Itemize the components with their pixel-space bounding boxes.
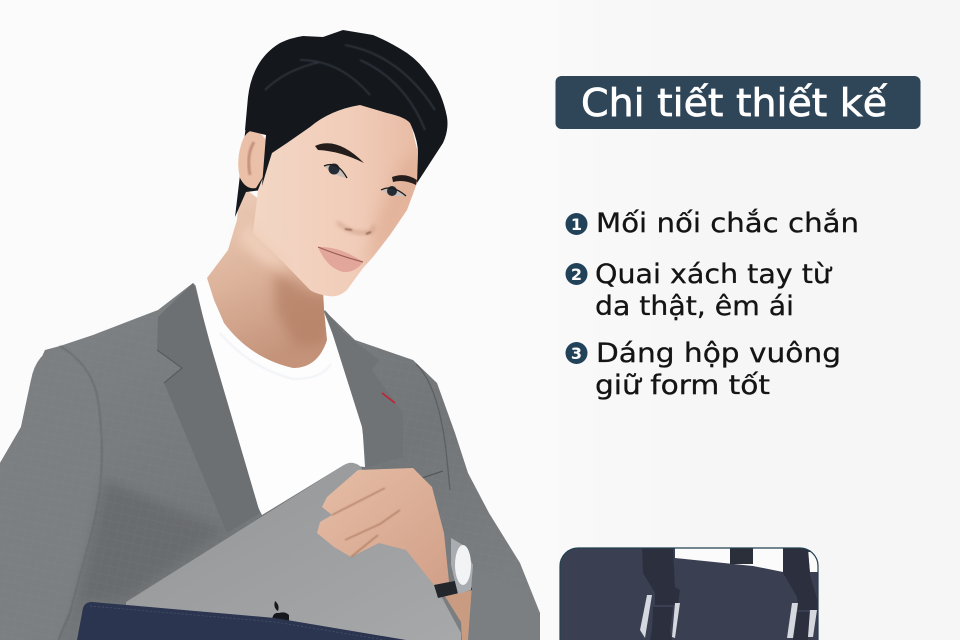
collar seam — [220, 333, 331, 379]
bag detail thumbnail — [560, 548, 818, 640]
sleeve shading — [0, 346, 102, 640]
bag body — [560, 548, 818, 640]
t-shirt — [195, 278, 365, 515]
far handle — [730, 548, 753, 564]
number badge 1 — [566, 213, 588, 235]
list item 2 — [566, 259, 833, 322]
right strap — [783, 548, 818, 610]
jaw highlight blending face and neck — [238, 222, 292, 272]
photo: model with laptop and sleeve — [0, 30, 540, 640]
right armhole seam — [416, 364, 450, 490]
item 2 text: Quai xách tay từ — [595, 259, 833, 290]
left eye — [324, 164, 347, 178]
fabric texture — [0, 283, 540, 640]
watch dial — [455, 545, 471, 585]
apple logo — [272, 601, 289, 624]
wrist — [441, 585, 472, 640]
thumbnail image area — [560, 548, 818, 640]
laptop sleeve — [77, 602, 406, 640]
number badge 1: 1 — [571, 215, 582, 234]
lip line — [318, 247, 363, 262]
right lapel — [325, 310, 403, 467]
window above bag — [675, 548, 783, 572]
sleeve stitching — [90, 606, 385, 640]
under chin shadow — [270, 273, 327, 346]
left lapel edge — [157, 350, 182, 383]
right buckle — [787, 603, 817, 638]
hair highlights — [265, 45, 435, 130]
pocket — [422, 471, 443, 478]
left eyebrow — [315, 143, 364, 163]
number badge 2: 2 — [571, 265, 582, 284]
laptop — [126, 463, 461, 640]
right lower strap — [793, 612, 810, 640]
hand — [317, 468, 449, 585]
nose — [337, 222, 374, 233]
sleeve seam — [58, 346, 102, 640]
watch strap — [434, 578, 472, 598]
left eyelid — [324, 164, 347, 178]
title banner — [556, 76, 920, 129]
title text: Chi tiết thiết kế — [581, 81, 888, 125]
face shading — [368, 160, 418, 259]
right window — [808, 552, 818, 572]
right eye white — [381, 188, 406, 196]
left strap — [642, 548, 680, 605]
nostrils — [345, 229, 371, 234]
right eyelid — [381, 188, 406, 196]
left lapel — [157, 283, 260, 533]
jacket shadow — [70, 480, 225, 640]
left buckle — [640, 595, 680, 638]
number badge 3 — [566, 342, 588, 364]
banner background — [556, 76, 920, 129]
item 2 text: da thật, êm ái — [595, 291, 794, 322]
watch case — [451, 538, 473, 594]
number badge 3: 3 — [571, 344, 582, 363]
number badge 2 — [566, 263, 588, 285]
item 1 text: Mối nối chắc chắn — [596, 208, 859, 239]
left eye white — [324, 164, 347, 178]
left iris — [328, 164, 340, 174]
hair — [245, 30, 448, 186]
list item 1 — [566, 208, 859, 239]
item 3 text: Dáng hộp vuông — [596, 338, 841, 369]
right eye — [381, 186, 406, 196]
red stitch — [382, 393, 395, 403]
list item 3 — [566, 338, 841, 401]
right cuff — [468, 570, 540, 640]
watch — [451, 538, 473, 594]
neck — [207, 185, 345, 368]
right eyebrow — [392, 175, 417, 185]
face — [253, 103, 418, 296]
lips — [318, 247, 363, 272]
right iris — [387, 186, 397, 196]
jacket — [0, 283, 540, 640]
hair behind ear — [235, 125, 266, 217]
left lower strap — [650, 607, 673, 640]
thumbnail border — [560, 548, 818, 640]
ear inner — [249, 142, 254, 175]
item 3 text: giữ form tốt — [595, 370, 770, 401]
finger lines — [332, 488, 400, 557]
ear — [238, 130, 268, 188]
